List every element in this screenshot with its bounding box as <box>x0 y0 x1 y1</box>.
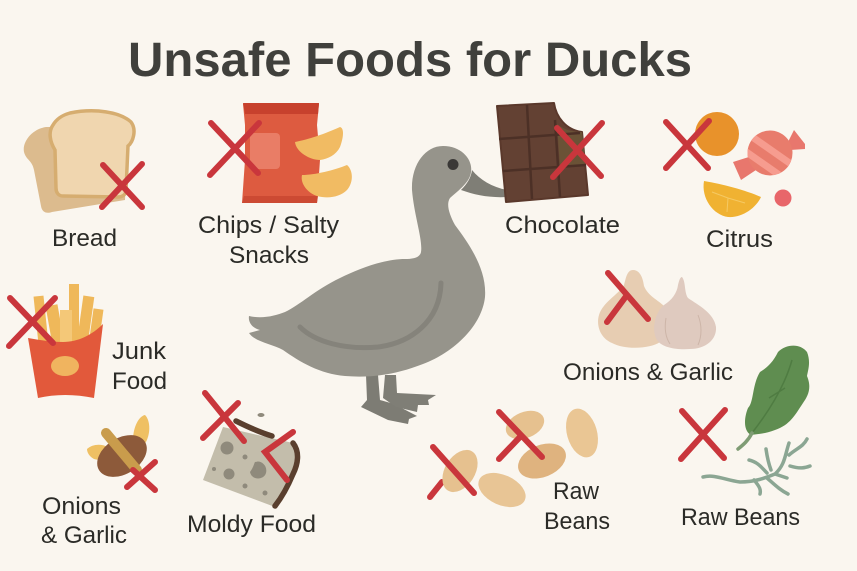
icon: chocolate <box>497 103 602 202</box>
label: junk food: Junk <box>112 338 167 365</box>
label: chips: Chips / Salty <box>198 212 339 239</box>
label: raw beans center <box>544 478 610 535</box>
icon: raw beans <box>430 405 603 514</box>
icon: bread <box>24 111 142 213</box>
icon: citrus and candy <box>666 112 805 217</box>
label: moldy food: Moldy Food <box>187 511 316 538</box>
icon: moldy bread <box>203 393 298 507</box>
icon: onion bits <box>87 415 155 490</box>
icon: leaf and twig <box>681 346 810 494</box>
icon: garlic bulbs <box>598 270 716 349</box>
label: onions garlic right: Onions & Garlic <box>563 359 733 386</box>
label: chocolate: Chocolate <box>505 212 620 239</box>
label: raw beans center: Beans <box>544 508 610 535</box>
label: raw beans center: Raw <box>553 478 600 505</box>
label: bread: Bread <box>52 225 117 252</box>
label: onions garlic left: & Garlic <box>41 522 127 549</box>
title: Unsafe Foods for Ducks <box>128 34 692 87</box>
label: chips: Snacks <box>229 242 309 269</box>
label: junk food: Food <box>112 368 167 395</box>
label: raw beans right: Raw Beans <box>681 504 800 531</box>
label: citrus: Citrus <box>706 226 773 253</box>
label: chips <box>198 212 339 269</box>
label: onions garlic left <box>41 493 127 549</box>
icon: chips bag <box>210 103 352 203</box>
icon: duck <box>249 146 507 424</box>
label: onions garlic left: Onions <box>42 493 121 520</box>
icon: fries <box>9 284 103 398</box>
label: junk food <box>112 338 167 395</box>
